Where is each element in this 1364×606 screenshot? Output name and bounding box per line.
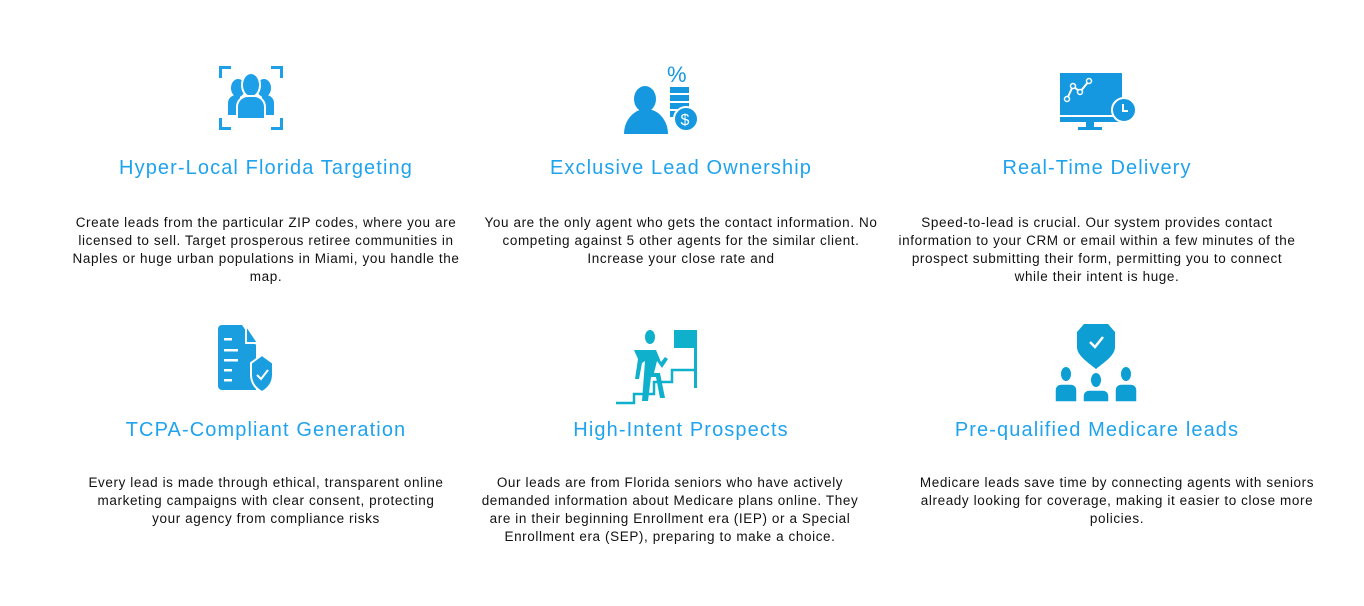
text: Exclusive: competing against 5 other agents for the similar client.: [502, 233, 860, 248]
icon: climbing stairs: [616, 330, 697, 404]
title: Real-Time: Real-Time Delivery: [1002, 157, 1192, 179]
text: High-Intent: [482, 475, 858, 544]
title: Pre-qualified: Pre-qualified Medicare leads: [955, 419, 1239, 441]
text: Hyper-Local: Create leads from the particular ZIP codes, where you are: [76, 215, 456, 230]
text: TCPA: [88, 475, 444, 526]
title: High-Intent: High-Intent Prospects: [573, 419, 789, 441]
text: High-Intent: demanded information about Medicare plans online. They: [482, 493, 858, 508]
text: Real-Time: Speed-to-lead is crucial. Our system provides contact: [921, 215, 1273, 230]
text: Real-Time: prospect submitting their form, permitting you to connect: [912, 251, 1282, 266]
text: Exclusive: You are the only agent who gets the contact information. No: [485, 215, 877, 230]
text: Real-Time: while their intent is huge.: [1015, 269, 1179, 284]
text: TCPA: Every lead is made through ethical, transparent online: [88, 475, 444, 490]
text: Pre-qualified: already looking for coverage, making it easier to close more: [921, 493, 1313, 508]
text: Hyper-Local: Naples or huge urban populations in Miami, you handle the: [73, 251, 459, 266]
text: Pre-qualified: Medicare leads save time by connecting agents with seniors: [920, 475, 1314, 490]
text: High-Intent: Enrollment era (SEP), preparing to make a choice.: [504, 529, 836, 544]
title: TCPA: TCPA-Compliant Generation: [126, 419, 406, 441]
text: Hyper-Local: map.: [250, 269, 282, 284]
text: Hyper-Local: licensed to sell. Target prosperous retiree communities in: [78, 233, 454, 248]
text: High-Intent: Our leads are from Florida seniors who have actively: [497, 475, 843, 490]
text: Pre-qualified: policies.: [1090, 511, 1144, 526]
text: Real-Time: [899, 215, 1295, 284]
text: Exclusive: [484, 215, 877, 266]
icon: compliant document: [218, 325, 272, 391]
icon: lead ownership: [624, 62, 697, 134]
text: Exclusive: Increase your close rate and: [587, 251, 775, 266]
icon: lead ownership: %: [667, 62, 687, 87]
text: Pre-qualified: [920, 475, 1314, 526]
text: Hyper-Local: [73, 215, 459, 284]
text: Real-Time: information to your CRM or email within a few minutes of the: [899, 233, 1295, 248]
icon: real-time monitor: [1060, 73, 1135, 130]
icon: targeting people: [219, 66, 283, 130]
icon: shield group: [1056, 324, 1136, 402]
title: Hyper-Local: Hyper-Local Florida Targeting: [119, 157, 413, 179]
text: High-Intent: are in their beginning Enrollment era (IEP) or a Special: [490, 511, 850, 526]
title: Exclusive: Exclusive Lead Ownership: [550, 157, 812, 179]
text: TCPA: your agency from compliance risks: [152, 511, 380, 526]
text: TCPA: marketing campaigns with clear consent, protecting: [98, 493, 434, 508]
icon: lead ownership: $: [680, 112, 690, 129]
